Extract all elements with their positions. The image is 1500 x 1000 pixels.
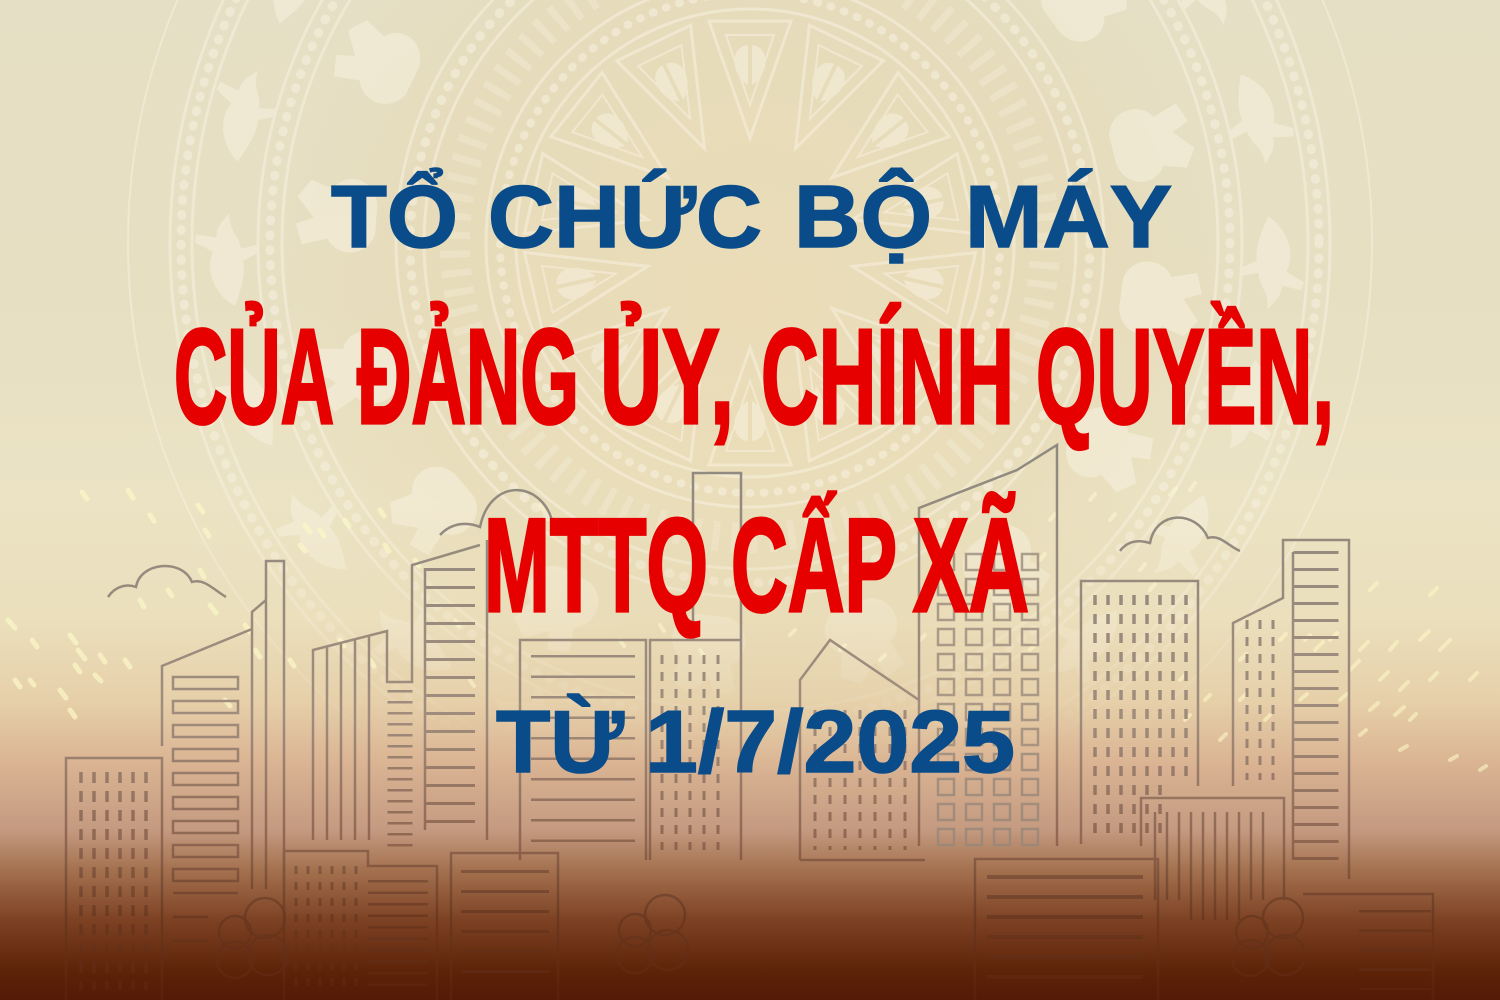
drum star triangles <box>524 21 976 465</box>
tree center <box>617 895 688 973</box>
building low center right <box>975 859 1158 1000</box>
drum figures band <box>294 0 1205 699</box>
drum birds band <box>176 0 1304 668</box>
heading line 1: TỔ <box>331 167 458 266</box>
cloud right <box>1120 518 1240 551</box>
cloud center <box>440 490 552 535</box>
building F <box>1141 798 1284 920</box>
building center tall <box>520 473 741 860</box>
drum rings <box>127 0 1373 662</box>
heading line 3: XÃ <box>913 491 1029 640</box>
heading line 1: MÁY <box>965 167 1172 266</box>
date line: 1/7/2025 <box>645 692 1015 791</box>
building low left <box>284 851 437 1000</box>
city skyline outlines <box>66 445 1433 1000</box>
heading line 2: CỦA <box>174 301 334 452</box>
building center right <box>800 640 925 860</box>
heading line 2: ỦY, <box>600 301 734 452</box>
heading line 3 <box>484 490 1029 640</box>
date line: TỪ <box>496 692 624 791</box>
tree left <box>217 898 288 978</box>
heading line 1: CHỨC <box>488 167 762 266</box>
building B <box>162 561 284 941</box>
date line <box>496 692 1015 791</box>
building C <box>313 540 487 852</box>
sparkles left cluster <box>8 490 419 717</box>
heading line 1: BỘ <box>794 167 932 266</box>
tree right <box>1232 898 1305 976</box>
building low center left <box>451 853 558 1000</box>
heading line 3: CẤP <box>731 490 897 640</box>
sparkles right cluster <box>1030 583 1486 770</box>
heading line 1 <box>331 167 1172 266</box>
cloud left <box>108 566 226 597</box>
title block <box>174 167 1334 791</box>
building D <box>1081 581 1198 844</box>
building with square windows <box>919 445 1057 851</box>
building H <box>1303 894 1433 1000</box>
building E <box>1233 540 1349 879</box>
heading line 2: ĐẢNG <box>357 301 579 452</box>
sparkles center cluster <box>455 483 1195 686</box>
heading line 2: CHÍNH <box>761 301 1014 452</box>
sparkle lights <box>8 483 1486 770</box>
bronze drum motif <box>127 0 1373 662</box>
heading line 3: MTTQ <box>484 492 708 640</box>
heading line 2 <box>174 301 1334 452</box>
building A <box>66 758 162 1000</box>
